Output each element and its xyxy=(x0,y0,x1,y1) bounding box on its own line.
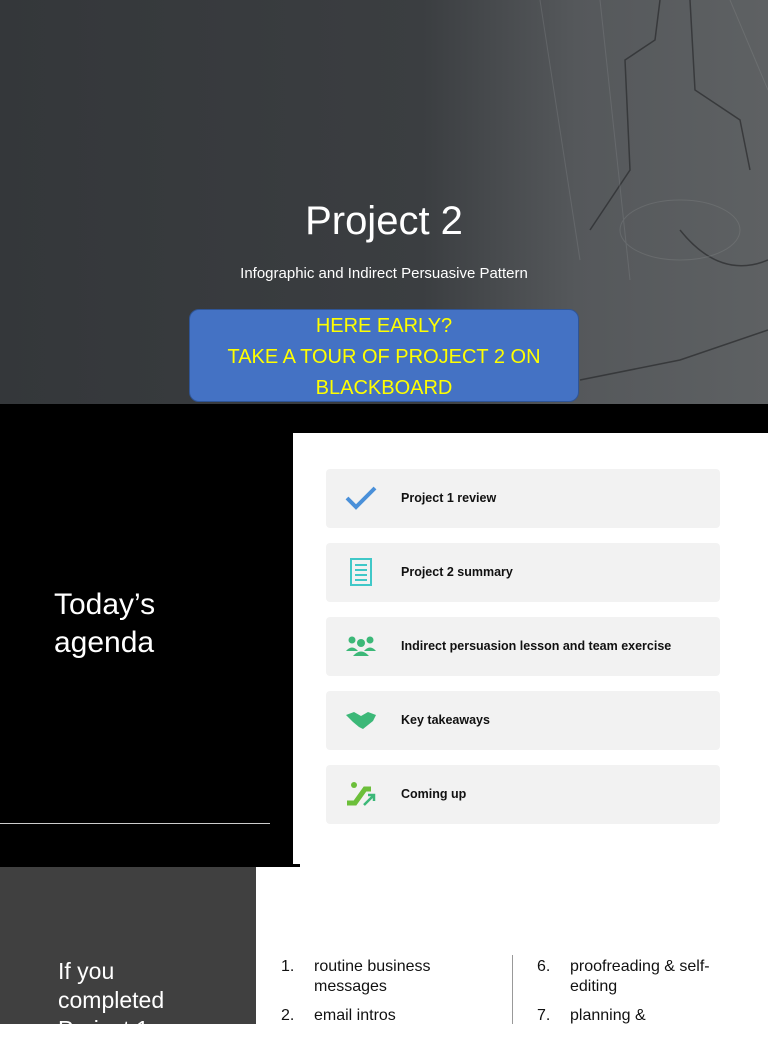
list column 1: email intros xyxy=(314,1007,396,1024)
heading: today's agenda: Today’s xyxy=(54,588,155,621)
callout: here early: TAKE A TOUR OF PROJECT 2 ON xyxy=(227,346,541,368)
list column 1: 2. xyxy=(281,1007,294,1024)
item 5: Coming up xyxy=(401,787,466,801)
heading: today's agenda: agenda xyxy=(54,626,154,659)
callout: here early xyxy=(189,309,579,402)
item 3: Indirect persuasion lesson and team exercise xyxy=(401,639,671,653)
title: Project 2 xyxy=(305,199,463,243)
subtitle: Infographic and Indirect Persuasive Pattern xyxy=(240,265,528,282)
heading: Project 1 on xyxy=(58,1016,181,1042)
item 2 xyxy=(326,543,720,602)
list column 1: 1. xyxy=(281,958,294,975)
item 1: Project 1 review xyxy=(401,491,496,505)
heading: today's agenda xyxy=(54,588,155,659)
black band xyxy=(0,404,768,433)
list column 2: 7. xyxy=(537,1007,550,1024)
item 4: Key takeaways xyxy=(401,713,490,727)
list column 2 xyxy=(537,958,710,1024)
slide 2: agenda left panel xyxy=(0,433,293,866)
black strip xyxy=(0,864,300,867)
heading: completed xyxy=(58,987,164,1013)
agenda list xyxy=(326,469,720,824)
callout: here early: BLACKBOARD xyxy=(316,377,452,399)
blueprint decoration xyxy=(540,0,768,381)
list column 2: proofreading & self-editing xyxy=(570,958,710,995)
list column 2: planning & xyxy=(570,1007,646,1024)
list column 2: 6. xyxy=(537,958,550,975)
list column 1: routine business messages xyxy=(314,958,431,995)
item 4 xyxy=(326,691,720,750)
slide 3: left panel xyxy=(0,867,256,1024)
heading xyxy=(58,958,181,1042)
heading: If you xyxy=(58,958,114,984)
list column 1 xyxy=(281,958,431,1024)
item 1 xyxy=(326,469,720,528)
item 5 xyxy=(326,765,720,824)
callout: here early: HERE EARLY? xyxy=(316,315,452,337)
item 3 xyxy=(326,617,720,676)
slide 1: title background xyxy=(0,0,768,404)
item 2: Project 2 summary xyxy=(401,565,513,579)
